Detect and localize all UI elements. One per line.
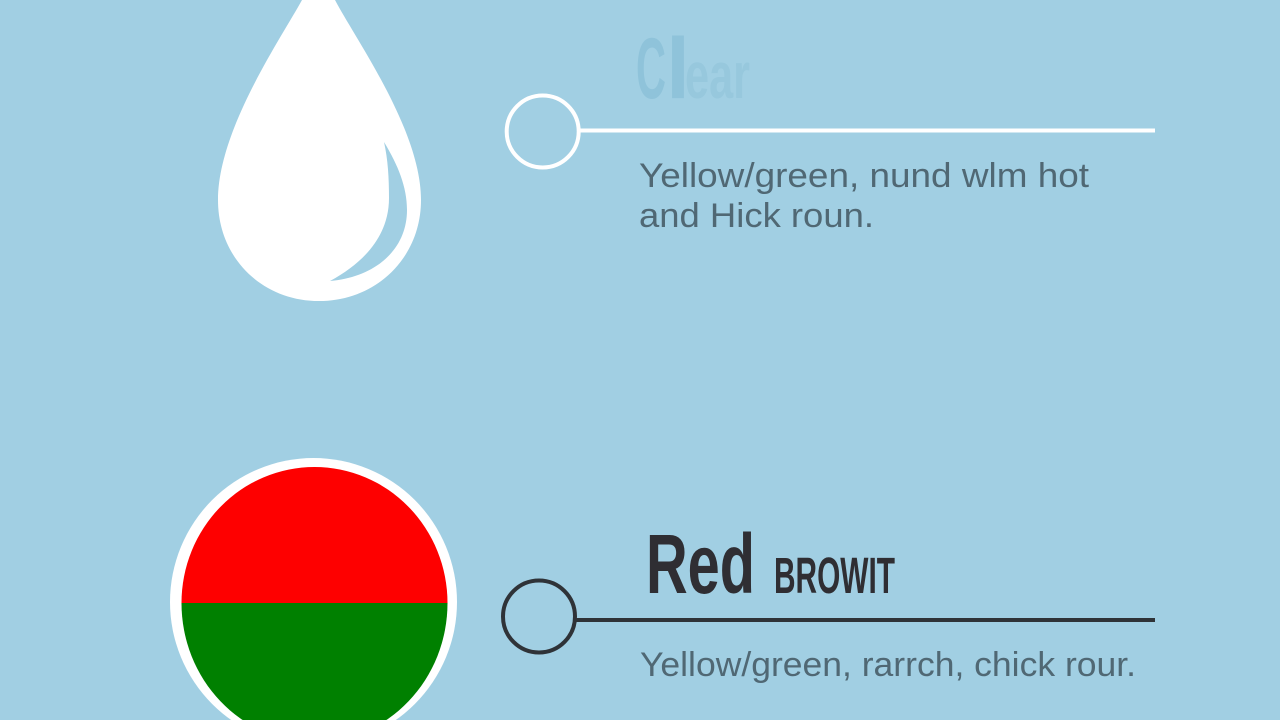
heading: Red Browit <box>646 517 895 611</box>
heading: Clear: l <box>666 21 690 117</box>
text block: red description: Yellow/green, rarrch, chick rour. <box>640 646 1136 684</box>
heading: Red Browit: BROWIT <box>774 547 895 604</box>
heading: Clear: ear <box>685 38 750 112</box>
heading: Red Browit: Red <box>646 517 755 611</box>
heading: Clear <box>636 21 750 117</box>
marker: clear item circle and line <box>507 96 1155 168</box>
text block: clear description: Yellow/green, nund wlm hot <box>639 157 1090 195</box>
icon: water drop <box>218 0 421 301</box>
heading: Clear: C <box>636 21 666 117</box>
text block: clear description <box>639 157 1090 235</box>
marker: red item circle and line <box>503 580 1155 652</box>
icon: red and green circle <box>170 458 457 720</box>
text block: clear description: and Hick roun. <box>639 197 874 235</box>
